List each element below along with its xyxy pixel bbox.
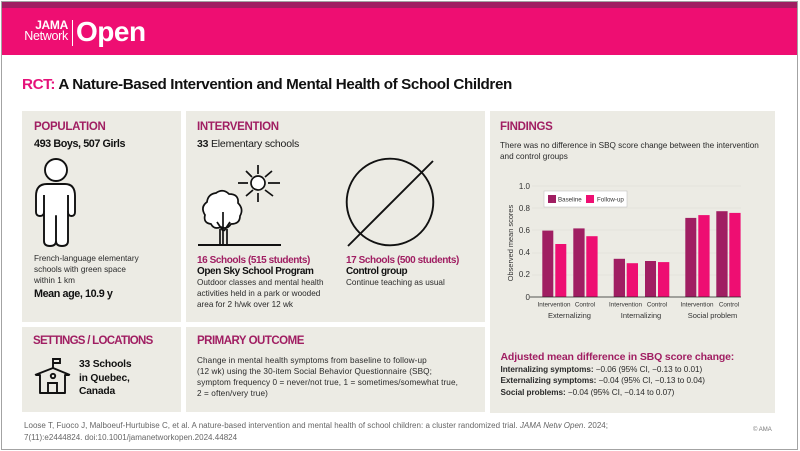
x axis labels: Control [647, 302, 667, 308]
results heading: Adjusted mean difference in SBQ score change: [500, 351, 734, 363]
x axis group labels [548, 311, 737, 320]
heading: intervention: INTERVENTION [197, 121, 279, 133]
logo: JAMA Network Open: Network [24, 29, 68, 43]
copyright: © AMA [753, 427, 772, 433]
header top strip [2, 2, 797, 8]
results list: Externalizing symptoms: −0.04 (95% CI, −0.13 to 0.04) [500, 376, 705, 385]
panel: intervention [186, 111, 485, 322]
heading: settings: SETTINGS / LOCATIONS [33, 335, 153, 347]
arm description: area for 2 h/wk over 12 wk [197, 300, 293, 309]
location text: Canada [79, 386, 115, 397]
bar chart [506, 182, 741, 320]
location text: 33 Schools [79, 359, 131, 370]
arm description: activities held in a park or wooded [197, 289, 320, 298]
intervention arm [197, 255, 324, 309]
findings summary: and control groups [500, 152, 568, 161]
findings summary [500, 141, 759, 161]
control arm [346, 255, 459, 287]
outcome description: symptom frequency 0 = never/not true, 1 = sometimes/somewhat true, [197, 378, 458, 387]
location text: in Quebec, [79, 372, 130, 384]
panel: population [22, 111, 181, 322]
y axis labels: 0.8 [519, 204, 531, 213]
x axis labels [538, 302, 739, 308]
legend [544, 191, 627, 207]
citation: Loose T, Fuoco J, Malboeuf-Hurtubise C, et al. A nature-based intervention and mental health of school children: a cluster randomized trial. JAMA Netw Open. 2024; [24, 421, 608, 430]
panel: findings [490, 111, 775, 413]
x axis labels: Intervention [609, 302, 642, 308]
legend: Baseline [558, 196, 582, 204]
bars: internalizing [614, 259, 669, 297]
outcome description: (12 wk) using the 30-item Social Behavior Questionnaire (SBQ; [197, 367, 432, 376]
results list [500, 364, 705, 396]
outcome description: 2 = often/very true) [197, 389, 268, 398]
y axis labels: 0 [526, 293, 531, 302]
y axis labels: 0.6 [519, 226, 531, 235]
header band [2, 2, 797, 55]
arm description: Outdoor classes and mental health [197, 278, 324, 287]
citation: 7(11):e2444824. doi:10.1001/jamanetworkopen.2024.44824 [24, 432, 237, 442]
mean age: Mean age, 10.9 y [34, 288, 113, 300]
x axis group labels: Internalizing [621, 311, 661, 320]
control size: 17 Schools (500 students) [346, 255, 459, 266]
x axis group labels: Social problem [688, 311, 737, 320]
y axis title: Observed mean scores [506, 204, 515, 281]
findings summary: There was no difference in SBQ score change between the intervention [500, 141, 759, 150]
x axis labels: Control [575, 302, 595, 308]
x axis labels: Intervention [681, 302, 714, 308]
logo: JAMA Network Open: JAMA [35, 18, 68, 32]
icon: tree and sun [198, 165, 281, 246]
panel: primary outcome [186, 327, 485, 412]
results list: Social problems: −0.04 (95% CI, −0.14 to 0.07) [500, 388, 674, 396]
bars: social problem [685, 211, 741, 297]
x axis labels: Intervention [538, 302, 571, 308]
population description: schools with green space [34, 265, 126, 274]
number of schools: 33 Elementary schools [197, 138, 299, 150]
logo: JAMA Network Open [24, 16, 146, 47]
results list: Internalizing symptoms: −0.06 (95% CI, −0.13 to 0.01) [500, 364, 702, 374]
icon: person [35, 158, 76, 247]
adjusted mean difference results [500, 351, 734, 396]
y axis labels: 0.4 [519, 248, 531, 257]
population description: French-language elementary [34, 254, 139, 263]
location text [79, 359, 132, 397]
control description: Continue teaching as usual [346, 278, 445, 287]
population count: 493 Boys, 507 Girls [34, 138, 125, 150]
icon: control group empty circle [346, 158, 434, 247]
population description: within 1 km [34, 276, 75, 285]
y axis labels [519, 182, 531, 302]
logo: JAMA Network Open: Open [76, 16, 146, 47]
arm description [197, 278, 324, 309]
x axis labels: Control [719, 302, 739, 308]
heading: findings: FINDINGS [500, 121, 553, 133]
x axis group labels: Externalizing [548, 311, 591, 320]
heading: primary outcome: PRIMARY OUTCOME [197, 335, 304, 347]
y axis labels: 1.0 [519, 182, 531, 191]
bars: externalizing [542, 228, 598, 297]
arm size: 16 Schools (515 students) [197, 255, 310, 266]
citation [24, 421, 608, 442]
population description [34, 254, 139, 285]
y axis labels: 0.2 [519, 270, 531, 279]
icon: school house [34, 358, 70, 394]
panel: settings and locations [22, 327, 181, 412]
arm name: Open Sky School Program [197, 266, 313, 277]
heading: population: POPULATION [34, 121, 106, 133]
legend: Follow-up [597, 196, 624, 204]
control name: Control group [346, 266, 407, 277]
title: RCT: A Nature-Based Intervention and Mental Health of School Children [22, 76, 512, 93]
outcome description [197, 356, 458, 398]
outcome description: Change in mental health symptoms from baseline to follow-up [197, 356, 427, 364]
